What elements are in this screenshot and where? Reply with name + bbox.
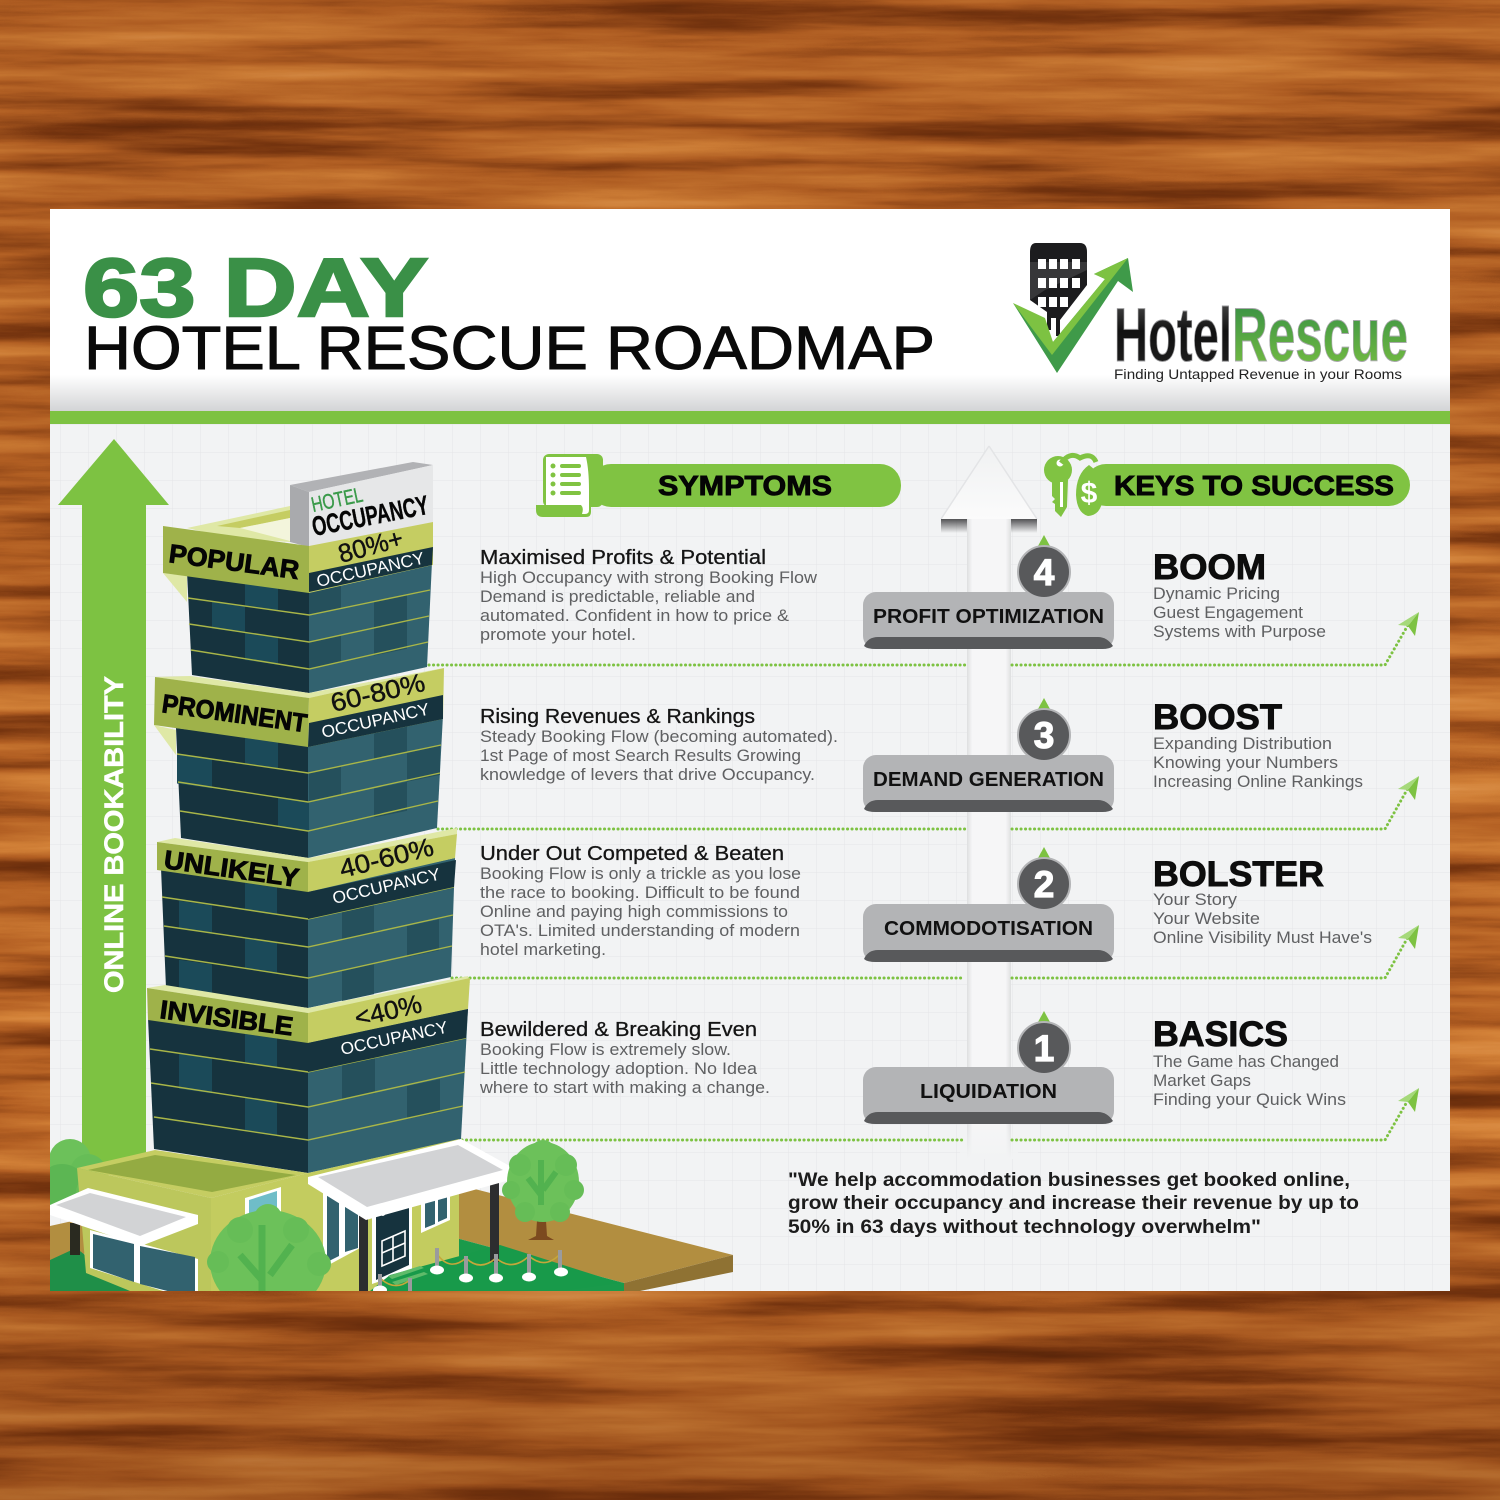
symptom: maximised profits: Demand is predictable, reliable and xyxy=(480,588,755,606)
key: bolster: Online Visibility Must Have's xyxy=(1153,929,1372,947)
symptom: rising revenues: Steady Booking Flow (becoming automated). xyxy=(480,728,838,746)
symptom: out competed: Online and paying high commissions to xyxy=(480,903,788,921)
tier 3: unlikely: OCCUPANCY xyxy=(331,865,442,908)
key: boom: Guest Engagement xyxy=(1153,604,1303,622)
step 4: profit optimization xyxy=(863,535,1114,649)
dotted levels xyxy=(429,612,1419,1140)
symptom: out competed: hotel marketing. xyxy=(480,941,606,959)
step 4: profit optimization: 4 xyxy=(1034,552,1055,593)
keys to success heading: KEYS TO SUCCESS xyxy=(1114,470,1394,501)
key: bolster: BOLSTER xyxy=(1153,855,1324,894)
logo wordmark: Hotel xyxy=(1114,293,1232,378)
tier 4: invisible: INVISIBLE xyxy=(158,994,295,1041)
title xyxy=(83,241,935,382)
roof and sign: HOTEL xyxy=(309,484,365,517)
tier 2: prominent: 60-80% xyxy=(328,667,428,718)
key: boost: BOOST xyxy=(1153,698,1282,737)
left canopy and window xyxy=(50,1188,198,1302)
bush: front xyxy=(207,1204,331,1291)
tier 4: invisible xyxy=(147,976,470,1173)
quote: "We help accommodation businesses get booked online, xyxy=(788,1169,1350,1191)
step 1: liquidation: 1 xyxy=(1034,1028,1054,1069)
key: boom: BOOM xyxy=(1153,548,1266,587)
green mat and posts xyxy=(359,1180,620,1291)
tier 2: prominent: OCCUPANCY xyxy=(320,700,431,742)
bollards and rope xyxy=(373,1248,568,1294)
symptom: bewildered: where to start with making a change. xyxy=(479,1079,770,1097)
tier 3: unlikely xyxy=(157,828,457,1008)
hotel base illustration xyxy=(50,1139,733,1291)
key: basics: BASICS xyxy=(1153,1015,1288,1054)
key: bolster: Your Story xyxy=(1153,891,1238,909)
key: boost: Expanding Distribution xyxy=(1153,735,1332,753)
quote xyxy=(788,1169,1359,1238)
symptom: bewildered: Booking Flow is extremely slow. xyxy=(480,1041,731,1059)
symptom: out competed: the race to booking. Difficult to be found xyxy=(480,884,800,902)
symptom: bewildered: Little technology adoption. No Idea xyxy=(480,1060,758,1078)
symptoms heading xyxy=(536,454,901,517)
tier 3: unlikely: UNLIKELY xyxy=(162,844,301,893)
key: basics xyxy=(1153,1015,1346,1109)
symptom: maximised profits: automated. Confident in how to price & xyxy=(480,607,789,625)
card background xyxy=(50,209,1450,1291)
tier 4: invisible: OCCUPANCY xyxy=(339,1018,449,1059)
arrow: online bookability xyxy=(58,439,169,1175)
arrow: central roadmap xyxy=(941,446,1037,1159)
symptom: rising revenues: 1st Page of most Search Results Growing xyxy=(480,747,801,765)
symptom: rising revenues: knowledge of levers that drive Occupancy. xyxy=(480,766,815,784)
icon: keys xyxy=(1044,455,1103,517)
tier 4: invisible: <40% xyxy=(352,988,425,1033)
building walls and roof xyxy=(77,1139,459,1291)
roof and sign: OCCUPANCY xyxy=(309,490,431,542)
main canopy xyxy=(308,1139,517,1220)
symptom: maximised profits: High Occupancy with strong Booking Flow xyxy=(480,569,817,587)
tier 3: unlikely: 40-60% xyxy=(336,831,437,884)
step 3: demand generation: 3 xyxy=(1034,715,1054,756)
quote: grow their occupancy and increase their revenue by up to xyxy=(788,1192,1359,1214)
symptoms heading: SYMPTOMS xyxy=(658,470,832,501)
keys to success heading xyxy=(1044,455,1410,517)
key: boost: Knowing your Numbers xyxy=(1153,754,1338,772)
icon: scroll xyxy=(536,454,901,517)
symptom: maximised profits xyxy=(480,547,817,644)
symptom: out competed: OTA's. Limited understanding of modern xyxy=(480,922,800,940)
tier 1: popular: POPULAR xyxy=(167,538,301,585)
tree: rear left xyxy=(50,1139,103,1255)
key: boost xyxy=(1153,698,1363,791)
step 1: liquidation xyxy=(863,1011,1114,1124)
tier 1: popular: OCCUPANCY xyxy=(315,549,426,591)
tree: right xyxy=(502,1140,584,1240)
logo tagline: Finding Untapped Revenue in your Rooms xyxy=(1114,366,1402,382)
tier 1: popular xyxy=(163,462,433,693)
tier 2: prominent: PROMINENT xyxy=(160,688,309,738)
step 3: demand generation xyxy=(863,698,1114,812)
icon: keys: $ xyxy=(1081,477,1098,510)
key: boost: Increasing Online Rankings xyxy=(1153,773,1363,791)
step 4: profit optimization: PROFIT OPTIMIZATION xyxy=(873,606,1104,628)
logo: hotel rescue xyxy=(1013,243,1408,382)
title: 63 day: 63 DAY xyxy=(83,241,428,334)
step 1: liquidation: LIQUIDATION xyxy=(920,1081,1057,1103)
key: bolster: Your Website xyxy=(1153,910,1260,928)
symptom: maximised profits: Maximised Profits & Potential xyxy=(480,547,766,569)
tier 1: popular: 80%+ xyxy=(335,523,406,569)
roof and sign xyxy=(187,462,433,547)
symptom: rising revenues: Rising Revenues & Rankings xyxy=(480,706,755,728)
symptom: maximised profits: promote your hotel. xyxy=(480,626,636,644)
arrow: online bookability: ONLINE BOOKABILITY xyxy=(99,676,129,993)
logo wordmark xyxy=(1114,293,1408,378)
symptom: out competed: Booking Flow is only a trickle as you lose xyxy=(480,865,801,883)
key: boom: Dynamic Pricing xyxy=(1153,585,1280,603)
key: boom xyxy=(1153,548,1326,641)
key: boom: Systems with Purpose xyxy=(1153,623,1326,641)
hotel tower xyxy=(147,462,470,1173)
step 2: commodotisation: 2 xyxy=(1034,864,1054,905)
ground xyxy=(50,1185,733,1291)
icon: check arrow xyxy=(1013,258,1133,373)
key: basics: Finding your Quick Wins xyxy=(1153,1091,1346,1109)
symptom: out competed xyxy=(480,843,801,959)
entrance with door and windows xyxy=(323,1188,450,1284)
title: hotel rescue roadmap: HOTEL RESCUE ROADMAP xyxy=(84,314,935,382)
logo wordmark: Rescue xyxy=(1232,293,1408,378)
icon: building xyxy=(1030,243,1087,336)
step 2: commodotisation: COMMODOTISATION xyxy=(884,918,1093,940)
symptom: bewildered xyxy=(479,1019,770,1097)
key: bolster xyxy=(1153,855,1372,947)
step 2: commodotisation xyxy=(863,847,1114,962)
key: basics: The Game has Changed xyxy=(1153,1053,1339,1071)
quote: 50% in 63 days without technology overwhelm" xyxy=(788,1216,1261,1238)
symptom: bewildered: Bewildered & Breaking Even xyxy=(480,1019,757,1041)
key: basics: Market Gaps xyxy=(1153,1072,1251,1090)
symptom: out competed: Under Out Competed & Beaten xyxy=(480,843,784,865)
step 3: demand generation: DEMAND GENERATION xyxy=(873,769,1104,791)
tier 2: prominent xyxy=(154,667,444,858)
symptom: rising revenues xyxy=(480,706,838,784)
